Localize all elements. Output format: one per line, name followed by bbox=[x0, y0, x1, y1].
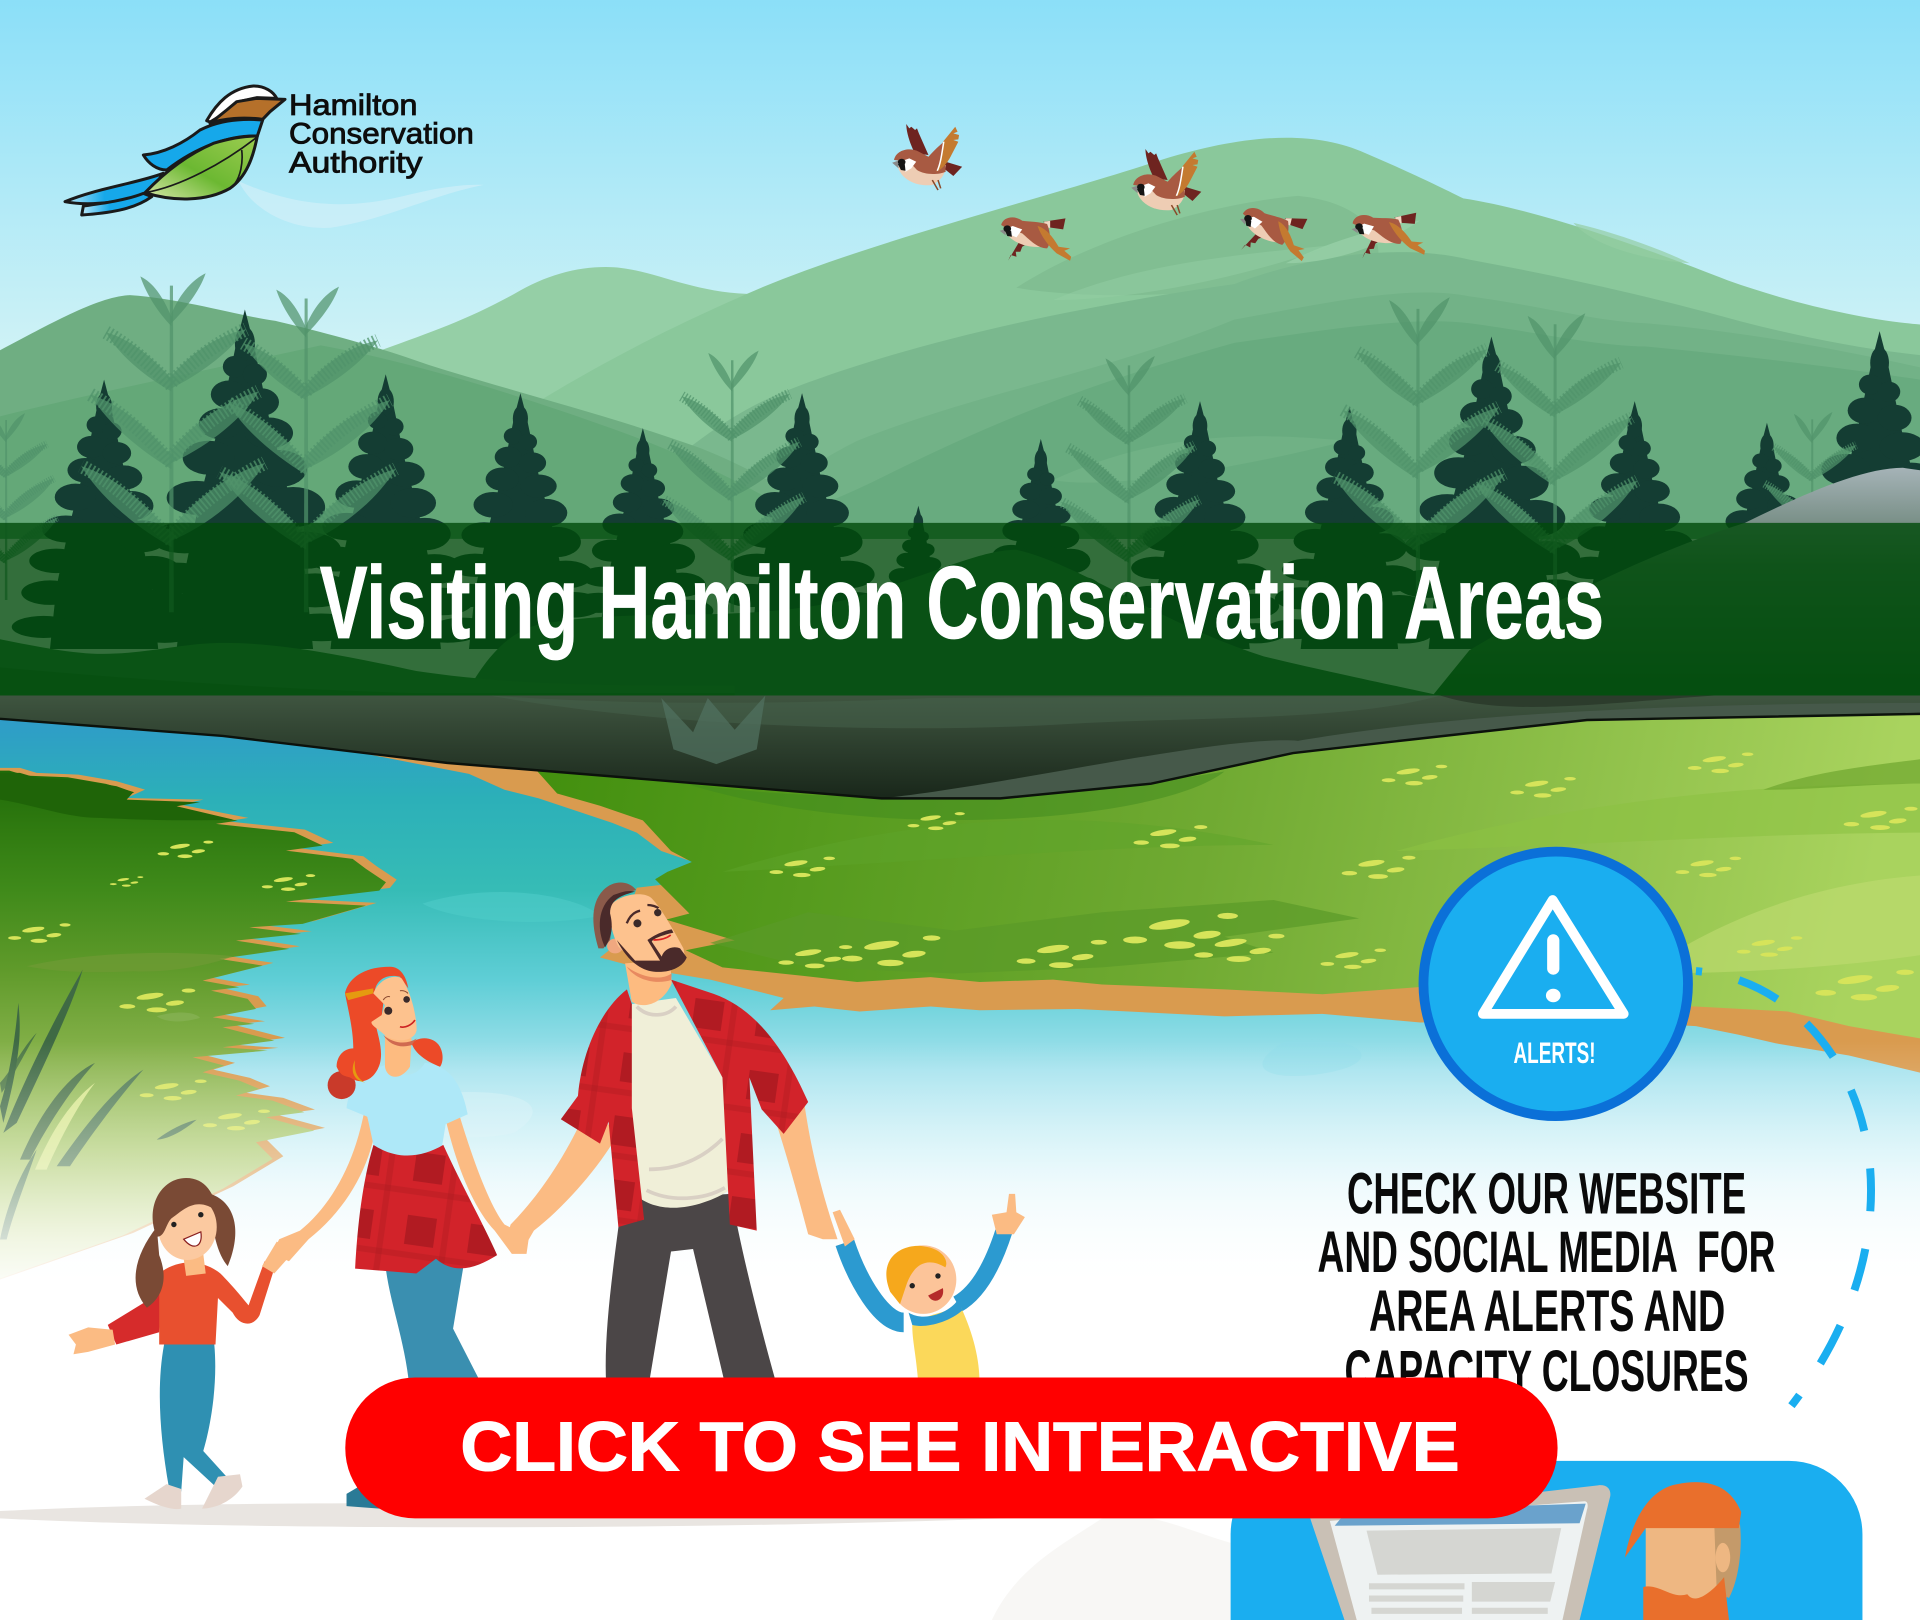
sky bbox=[0, 0, 1920, 367]
logo wordmark bbox=[289, 89, 474, 180]
dark foreground hill bbox=[0, 696, 1920, 798]
reeds bbox=[0, 970, 197, 1240]
mountains bbox=[0, 138, 1920, 539]
river bbox=[0, 710, 1920, 1298]
boy bbox=[833, 1194, 1025, 1384]
alert connector bbox=[1696, 971, 1871, 1406]
button label: CLICK TO SEE INTERACTIVE bbox=[460, 1408, 1460, 1486]
ground shadow bbox=[0, 1503, 1065, 1527]
laptop bbox=[1310, 1485, 1610, 1620]
logo bbox=[65, 86, 484, 228]
right grass bank bbox=[233, 698, 1920, 1073]
presenter head bbox=[1625, 1482, 1741, 1620]
logo wordmark: Authority bbox=[289, 147, 423, 180]
alerts badge bbox=[1423, 852, 1688, 1116]
title band bbox=[0, 523, 1920, 696]
logo waves bbox=[239, 181, 484, 228]
bird 2 bbox=[1000, 217, 1071, 261]
white fade bbox=[0, 1041, 1920, 1620]
alert text bbox=[1318, 1161, 1776, 1404]
bird 3 bbox=[1131, 149, 1201, 215]
logo bird bbox=[65, 86, 285, 215]
alerts label: ALERTS! bbox=[1513, 1037, 1596, 1070]
bird 4 bbox=[1233, 206, 1313, 261]
birds bbox=[892, 124, 1425, 261]
faded plant bbox=[992, 1515, 1231, 1620]
man bbox=[507, 883, 838, 1384]
logo wordmark: Conservation bbox=[289, 117, 474, 150]
family bbox=[69, 883, 1025, 1509]
call-to-action button bbox=[345, 1378, 1558, 1518]
bird 1 bbox=[892, 124, 962, 190]
woman bbox=[272, 967, 529, 1509]
trees bbox=[0, 273, 1920, 667]
bird 5 bbox=[1350, 211, 1425, 259]
laptop panel bbox=[1231, 1461, 1862, 1620]
girl bbox=[69, 1178, 294, 1509]
icon: warning triangle bbox=[1483, 900, 1624, 1014]
alert text: AREA ALERTS AND bbox=[1369, 1279, 1725, 1344]
logo wordmark: Hamilton bbox=[289, 89, 418, 122]
band hills bbox=[0, 468, 1920, 696]
left grass bank bbox=[0, 768, 397, 1282]
